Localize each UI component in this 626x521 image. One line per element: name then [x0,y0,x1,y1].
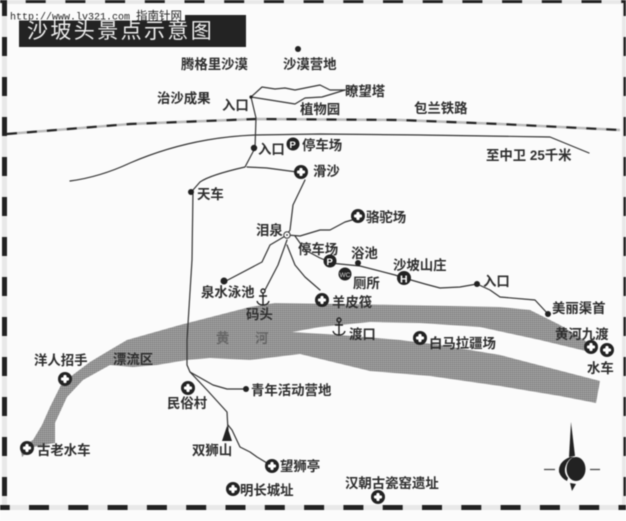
Yellow River label: 河 [255,331,268,346]
desert camp point: 沙漠营地 [283,56,337,72]
folk village: 民俗村 [167,395,208,411]
sheepskin raft: 羊皮筏 [332,294,372,310]
ferry: 渡口 [349,326,376,342]
nine ferries of the Yellow River: 水车 [587,360,614,376]
toilet: 厕所 [353,276,380,291]
label: Tengger Desert: 腾格里沙漠 [181,56,249,72]
wharf [246,289,273,322]
title banner [19,15,246,47]
bathing pool: 浴池 [351,246,378,261]
Yellow River label [216,330,268,346]
rafting area label: 漂流区 [113,351,153,367]
nine ferries of the Yellow River [555,326,614,376]
ancient waterwheel [20,441,91,458]
Shapotou hotel [393,257,447,286]
camel yard [351,209,406,225]
white horse riding: 白马拉疆场 [429,335,496,351]
canal head: 美丽渠首 [552,300,606,316]
parking 1: 停车场 [302,137,342,153]
title banner: 沙坡头景点示意图 [27,20,214,43]
railway label: 包兰铁路 [414,100,468,116]
sky car: 天车 [197,186,224,202]
white horse riding [413,331,496,351]
camel yard: 骆驼场 [366,209,406,225]
parking 2: 停车场 [298,241,338,257]
watermark url: http://www.lv321.com [10,12,130,24]
wharf: 码头 [246,307,273,322]
folk village [167,381,208,411]
Shapotou hotel: 沙坡山庄 [393,257,447,273]
spring swimming pool: 泉水泳池 [201,284,255,300]
tear spring: 泪泉 [256,222,283,238]
twin lion mountain [192,426,232,458]
spring swimming pool [201,278,255,300]
distance label: 至中卫 25千米 [486,147,572,163]
Han dynasty kiln site: 汉朝古瓷窑遗址 [345,475,439,491]
road network [70,85,589,463]
label: sand control: 治沙成果 [157,90,211,106]
south entrance: 入口 [258,142,285,157]
sheepskin raft [315,293,372,310]
desert camp point [283,46,337,72]
Shapotou hotel: H [400,274,408,286]
watermark url [8,8,185,24]
river: Yellow River [20,303,600,457]
railway: Baotou-Lanzhou line [7,119,620,134]
sand sliding: 滑沙 [313,164,340,179]
lion viewing pavilion: 望狮亭 [280,458,320,474]
Ming Great Wall site: 明长城址 [240,482,294,498]
waving boatman [34,352,88,386]
watermark url: 指南针网 [136,8,182,22]
sand sliding [294,164,340,179]
parking 1: P [290,140,296,151]
east entrance: 入口 [483,274,510,289]
toilet [338,268,380,291]
Yellow River label: 黄 [216,330,229,346]
botanical garden label: 植物园 [300,101,340,117]
parking 2: P [326,257,334,268]
twin lion mountain: 双狮山 [192,443,232,458]
icon: compass [544,422,600,491]
Han dynasty kiln site [345,475,439,504]
ancient waterwheel: 古老水车 [37,442,91,458]
waving boatman: 洋人招手 [34,352,88,368]
toilet: WC [340,272,351,279]
parking 2 [298,241,338,268]
nine ferries of the Yellow River: 黄河九渡 [555,326,609,342]
ferry [333,318,376,342]
north entrance: 入口 [222,98,249,113]
parking 1 [286,137,342,153]
watchtower label: 瞭望塔 [345,83,386,99]
lion viewing pavilion [265,458,320,474]
youth camp: 青年活动营地 [251,382,332,398]
